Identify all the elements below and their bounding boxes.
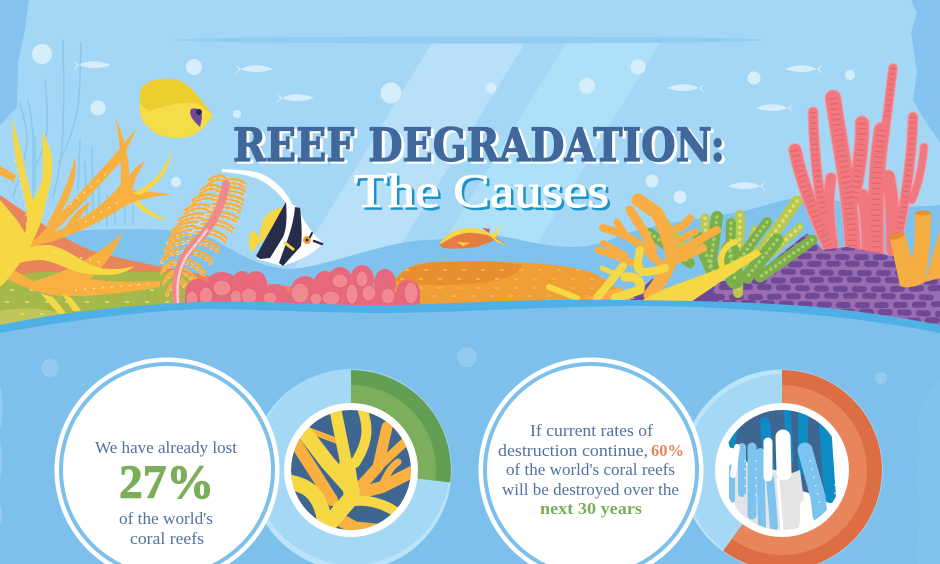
text: destruction statement: will be destroyed over the (502, 480, 679, 499)
lower bubbles and rock edges (0, 347, 940, 564)
rock wall right (911, 0, 940, 143)
branching coral left (0, 117, 172, 313)
sea pen coral (161, 175, 245, 303)
green hill left (0, 272, 215, 335)
title: REEF DEGRADATION: (233, 118, 725, 172)
text: of the world's coral reefs: of the world's (119, 509, 213, 528)
wave band (0, 300, 940, 564)
icon: seaweed (13, 40, 133, 227)
orange tube sponges (888, 210, 940, 287)
lower panel background (0, 306, 940, 564)
panel: underwater scene (0, 0, 940, 340)
text: destruction statement: If current rates of (530, 421, 653, 440)
water surface shadow (174, 36, 766, 44)
sand mound (388, 261, 630, 305)
light rays (275, 43, 660, 300)
text: destruction statement: of the world's coral reefs (506, 460, 675, 479)
text: destruction statement (498, 421, 684, 518)
text: of the world's coral reefs: coral reefs (130, 529, 204, 548)
small orange fish (439, 226, 507, 249)
text: destruction statement: next 30 years (540, 499, 642, 518)
subtitle: The Causes (356, 168, 612, 220)
text: already lost: We have already lost (95, 438, 237, 457)
circle: 27% statement (54, 358, 280, 564)
bannerfish (222, 169, 323, 266)
rock wall left (0, 0, 29, 125)
stat: 27%: 27% (119, 456, 214, 509)
icon: healthy coral (290, 408, 412, 530)
text: destruction statement: 60% (651, 441, 684, 460)
yellow butterfly fish (140, 79, 213, 138)
icon: bleached coral (728, 410, 836, 530)
donut chart: 27% lost (250, 369, 452, 564)
bubbles (32, 44, 855, 204)
background hills (0, 198, 940, 320)
donut chart: 60% destroyed (682, 370, 882, 564)
orange hill left (0, 195, 320, 320)
subtitle: The Causes (354, 165, 609, 218)
text: destruction statement: destruction continue, (498, 441, 648, 460)
circle: 60% statement (478, 358, 704, 564)
pink brain coral (185, 265, 420, 308)
small background fish (73, 60, 823, 192)
text: of the world's coral reefs (119, 509, 213, 548)
green finger coral (650, 201, 812, 293)
purple coral (680, 233, 940, 330)
orange and yellow staghorn coral right (549, 200, 761, 304)
title: REEF DEGRADATION: (236, 120, 728, 174)
tube sponge pink coral (795, 68, 924, 255)
